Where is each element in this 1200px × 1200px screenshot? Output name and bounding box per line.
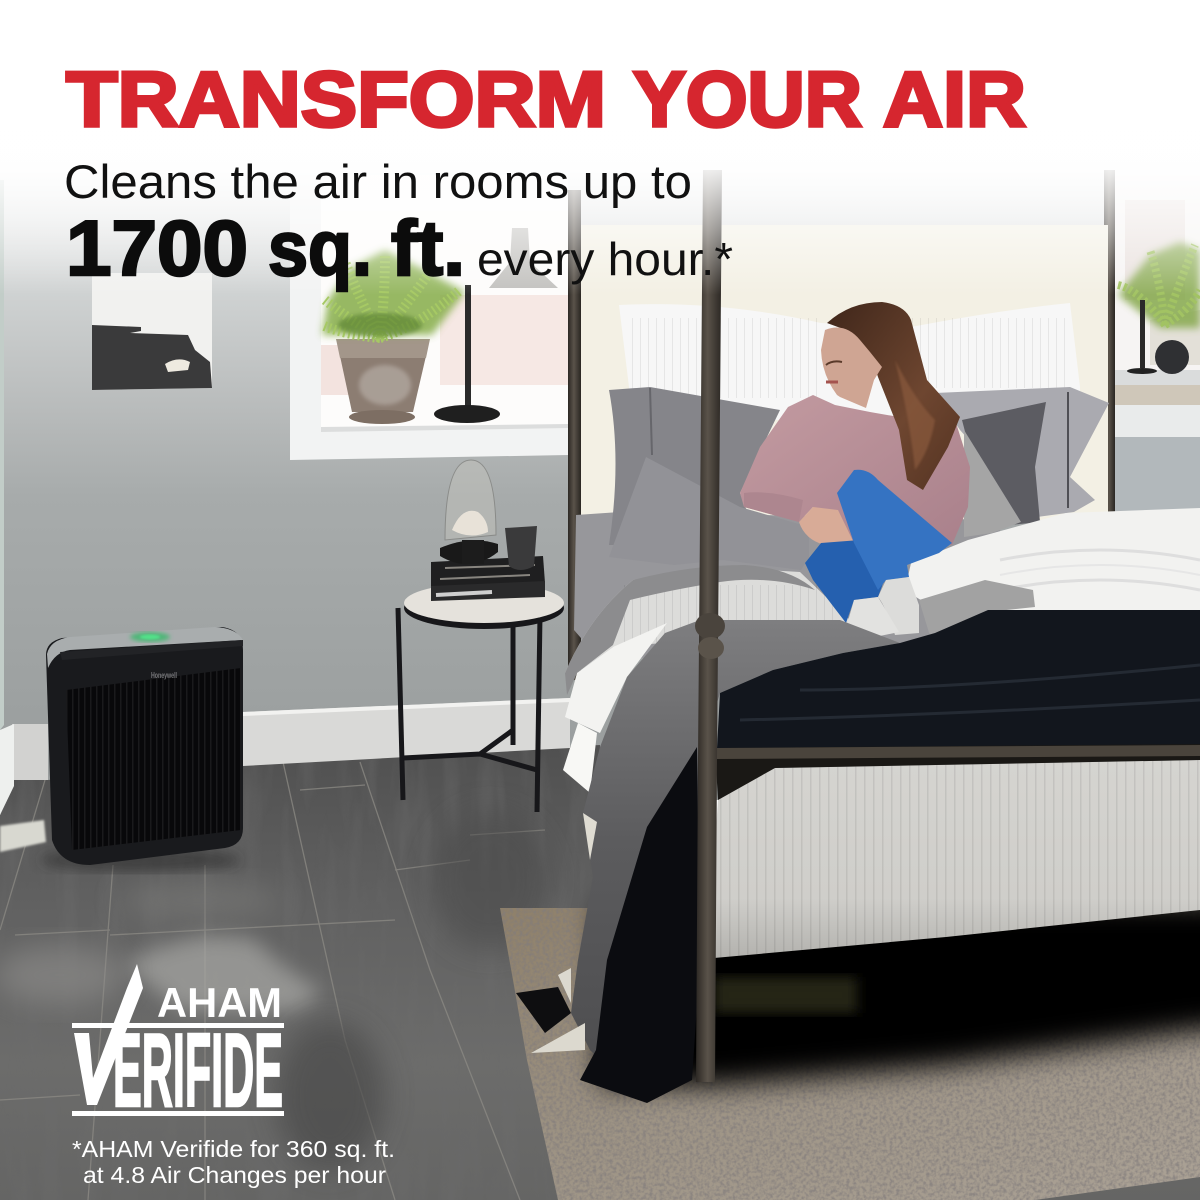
grey blanket fold [919,580,1035,636]
title: AIR [883,55,1026,143]
headline coverage figure: sq. [268,204,372,292]
left wall corner [0,180,4,730]
sweater [740,395,970,560]
white fade over top of photo [0,0,1200,295]
title: TRANSFORM [66,55,606,143]
baseboard [0,698,570,815]
headboard [581,225,1108,520]
hand [799,507,854,545]
right window and shelf [1110,170,1200,517]
socks [878,577,919,635]
subtitle line: Cleans the air in rooms up to [64,155,692,208]
grey throw over bed side [571,620,900,1060]
AHAM wordmark: AHAM [157,979,282,1026]
footnote: *AHAM Verifide for 360 sq. ft. [72,1136,395,1162]
framed art [92,273,212,390]
front bed post [695,170,725,1082]
AHAM Verifide logo [72,964,284,1129]
headline coverage figure: 1700 [66,204,248,292]
rug [500,908,1200,1200]
hair highlight [895,360,935,470]
white back pillows [619,303,1080,420]
check mark [74,964,143,1105]
brand label: Honeywell [151,671,177,680]
footnote [72,1136,395,1188]
side table [398,583,564,812]
room background wall [0,0,1200,800]
back bed posts [568,170,1115,680]
stacked books, cloche and cup [431,460,545,601]
throw fringe [583,813,597,860]
grey pillows [609,387,1109,570]
headline coverage figure: ft. [391,204,465,292]
air purifier [46,627,243,865]
shadow under bed [600,900,1200,1085]
footnote: at 4.8 Air Changes per hour [83,1162,386,1188]
window lamp [434,228,558,423]
title [66,55,1026,143]
title: YOUR [633,55,862,143]
mattress side [714,760,1200,958]
window [290,170,568,460]
lower fringe [531,968,585,1053]
woman on bed [740,302,970,638]
floor with planks [0,745,1200,1200]
headline coverage figure [66,204,733,292]
bed rail [715,744,1200,800]
jeans [805,540,885,623]
face [821,328,882,408]
bed top covers [563,508,1200,793]
bed fitted sheet and base [574,512,1000,660]
white ribbed cover edge [565,623,667,733]
headline coverage figure: every hour.* [477,233,733,285]
text: ERIFIDE [113,1013,283,1129]
dark blanket [717,610,1200,748]
potted fern [322,250,465,424]
hair [827,302,960,490]
grey sheet drape [565,565,815,695]
dark throw layer [516,747,700,1103]
